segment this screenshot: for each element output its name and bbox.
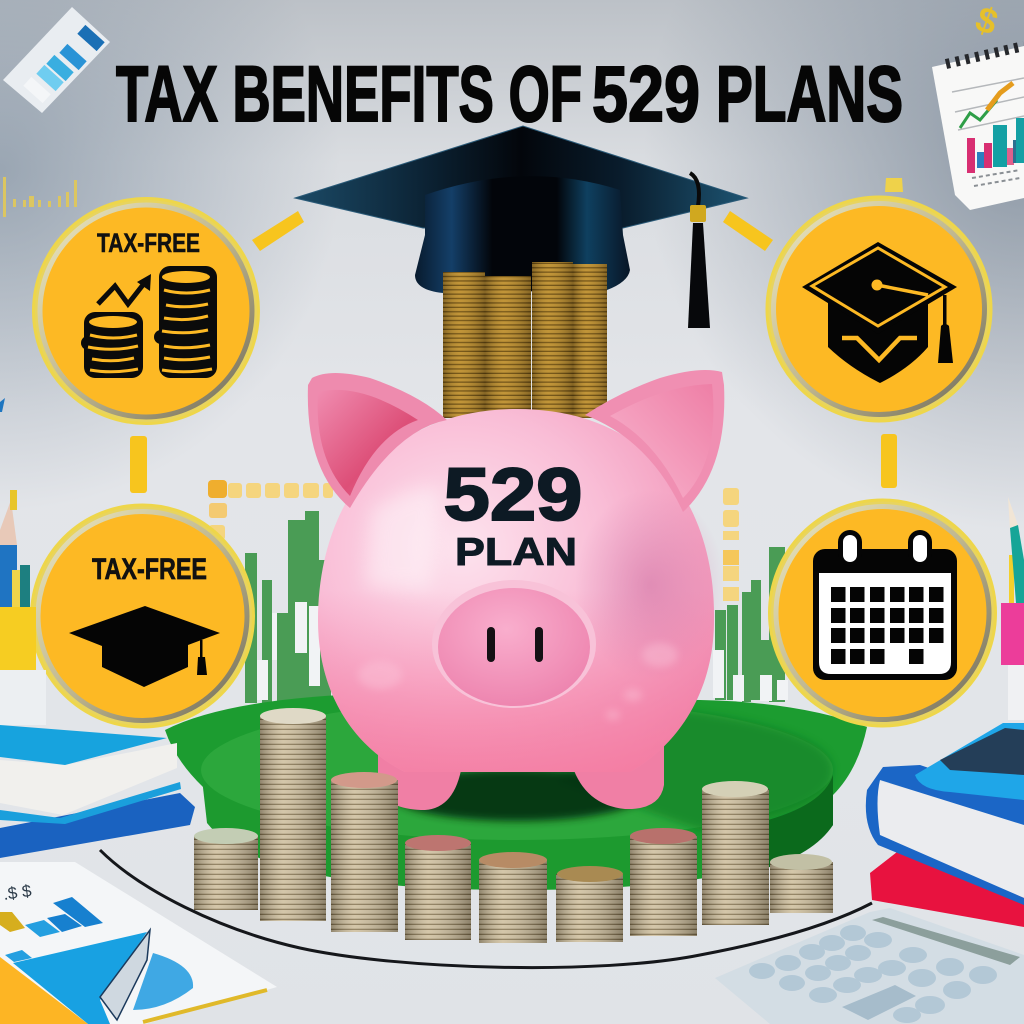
badge: education shield — [767, 197, 991, 421]
badge: calendar — [770, 500, 996, 726]
icon: coin stacks with growth arrow — [81, 266, 217, 378]
coin stacks row — [194, 708, 833, 943]
pig label: PLAN — [455, 531, 577, 574]
pig snout — [432, 580, 596, 708]
badge label: tax-free: TAX-FREE — [97, 228, 200, 258]
piggy bank — [308, 370, 725, 810]
report chart bars — [0, 897, 103, 962]
icon: shield with graduation cap — [802, 242, 957, 383]
small background chart top left — [3, 177, 77, 217]
icon: calendar — [813, 530, 957, 680]
coin stacks under the cap — [443, 262, 607, 418]
title: TAX BENEFITS OF — [116, 49, 582, 138]
shadow under pig — [392, 769, 642, 821]
books left — [0, 725, 195, 858]
report label: .$ $ — [2, 881, 33, 904]
icon: ruler card top left — [3, 7, 110, 113]
badge: tax-free growth — [34, 198, 258, 424]
pig body — [318, 409, 714, 772]
small blue marker left — [0, 398, 5, 412]
pig left ear — [308, 373, 447, 508]
calculator top right — [915, 723, 1024, 800]
badge label: tax-free: TAX-FREE — [92, 553, 207, 586]
pencil cup right — [1001, 497, 1024, 720]
pig right ear — [585, 370, 724, 512]
pig highlights — [365, 488, 440, 590]
calculator bottom right — [715, 908, 1024, 1024]
notepad bars — [967, 118, 1024, 173]
decorative arc dashes — [130, 178, 903, 493]
pig shading — [575, 490, 725, 680]
cap tassel — [688, 173, 710, 328]
pig label — [444, 453, 582, 574]
title: 529 — [592, 49, 700, 138]
table edge line — [100, 850, 872, 968]
pencil cup left — [0, 490, 46, 725]
pen — [100, 930, 150, 1020]
icon: graduation cap — [69, 606, 220, 687]
pig feet — [378, 740, 664, 810]
graduation cap — [295, 126, 747, 328]
notepad chart top right — [932, 46, 1024, 210]
report paper bottom left — [0, 862, 277, 1024]
books right — [866, 765, 1024, 927]
green platform — [165, 695, 867, 890]
title: PLANS — [716, 49, 903, 138]
pig label: 529 — [444, 453, 582, 536]
background green bar chart — [245, 511, 788, 705]
pig nostrils — [487, 627, 543, 662]
background yellow dotted line chart — [208, 480, 739, 601]
badge: tax-free education — [32, 505, 254, 727]
